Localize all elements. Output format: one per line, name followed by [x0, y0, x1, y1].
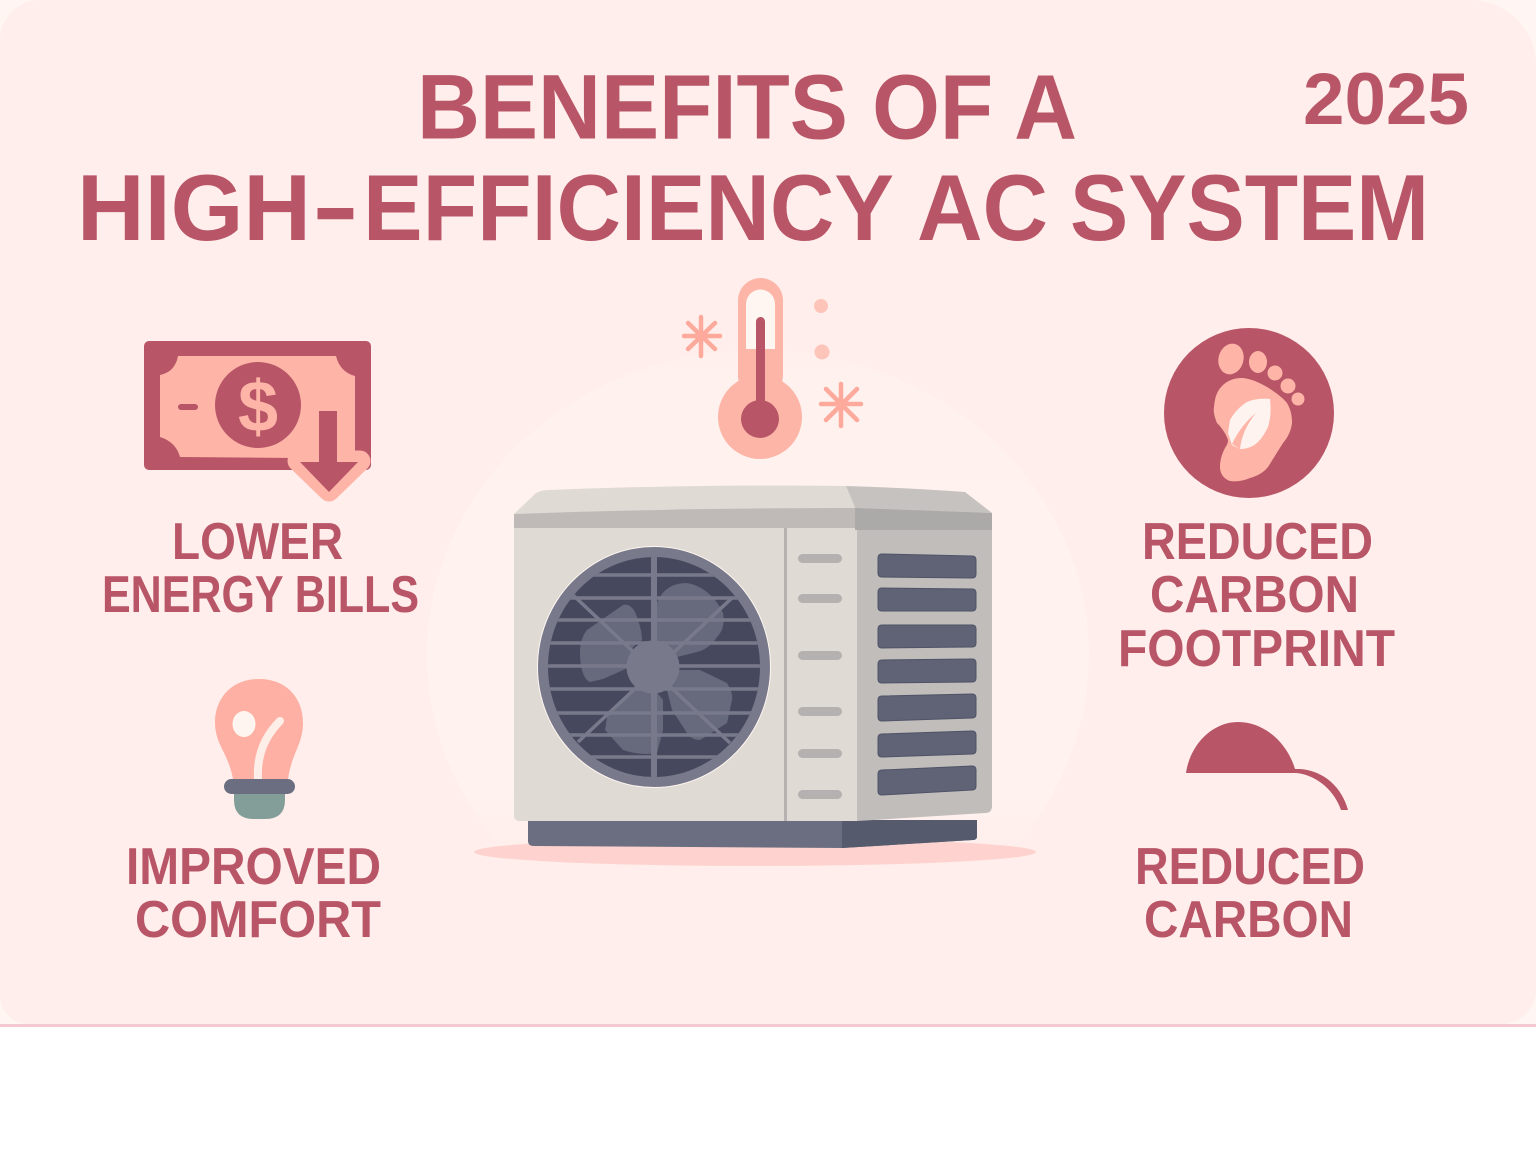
title: SYSTEM [1070, 155, 1429, 260]
illustration: outdoor AC unit [514, 486, 992, 848]
unit body [514, 508, 992, 821]
label: improved comfort [126, 838, 381, 949]
title: AC [917, 155, 1048, 260]
icon: footprint with leaf [1164, 328, 1334, 498]
title: BENEFITS OF A [417, 56, 1077, 158]
label: lower energy bills: ENERGY BILLS [102, 566, 419, 624]
title: EFFICIENCY [363, 155, 894, 260]
label: reduced carbon footprint [1118, 513, 1395, 678]
label: improved comfort: IMPROVED [126, 838, 381, 896]
unit base [528, 820, 977, 848]
label: lower energy bills [102, 513, 419, 624]
side vents [878, 554, 976, 795]
label: reduced carbon footprint: REDUCED [1142, 513, 1373, 571]
grille bars [548, 557, 760, 777]
label: improved comfort: COMFORT [135, 891, 381, 949]
title [77, 56, 1429, 260]
control panel slots [798, 554, 842, 799]
fan grille [530, 546, 780, 790]
fan blades [580, 583, 732, 754]
title: HIGH [77, 155, 311, 260]
label: reduced carbon [1135, 838, 1365, 949]
label: reduced carbon footprint: CARBON [1150, 566, 1359, 624]
label: reduced carbon footprint: FOOTPRINT [1118, 620, 1395, 678]
icon: banknote with down arrow [144, 341, 371, 492]
icon: thermometer with snowflakes [684, 278, 861, 459]
year label: 2025 [1303, 59, 1469, 140]
label: reduced carbon: REDUCED [1135, 838, 1365, 896]
soft halo behind unit [427, 350, 1089, 960]
title: - [312, 153, 359, 258]
label: lower energy bills: LOWER [172, 513, 343, 571]
icon: light bulb [215, 679, 303, 819]
label: reduced carbon: CARBON [1144, 891, 1353, 949]
icon: banknote with down arrow: $ [238, 367, 278, 447]
ground shadow [474, 838, 1036, 866]
icon: carbon cloud shape [1186, 722, 1348, 810]
unit top face [514, 486, 992, 514]
